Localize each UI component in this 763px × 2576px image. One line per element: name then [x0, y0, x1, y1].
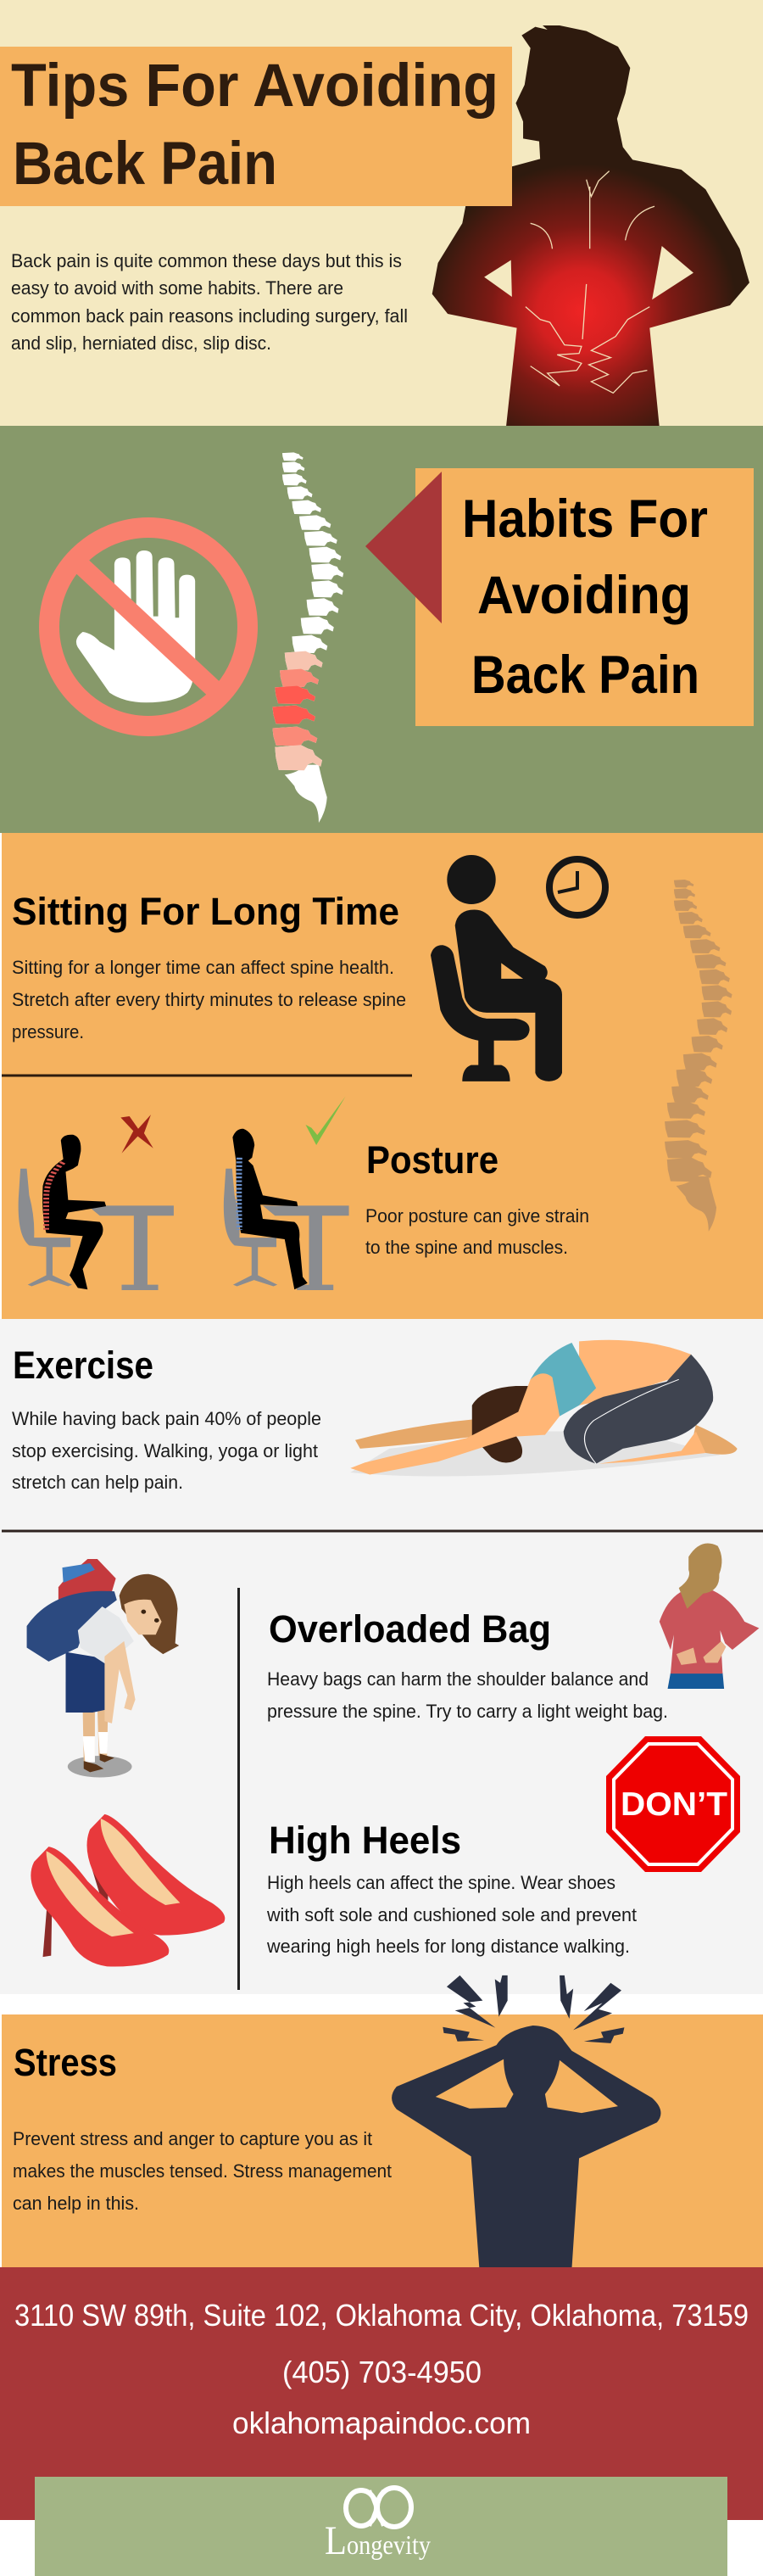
panel: sitting and posture [2, 833, 763, 1319]
icon: don't stop sign [606, 1736, 740, 1872]
heading: posture: Posture [366, 1138, 498, 1182]
title banner: Back Pain [13, 131, 277, 198]
text: sitting [12, 957, 406, 1042]
logo wordmark: Longevity [325, 2518, 431, 2563]
intro text: easy to avoid with some habits. There are [11, 277, 343, 299]
text: sitting: pressure. [12, 1021, 84, 1042]
panel: habits [0, 426, 763, 833]
text: high heels: with soft sole and cushioned sole and prevent [266, 1904, 637, 1925]
text: high heels: wearing high heels for long distance walking. [266, 1936, 630, 1957]
intro text: Back pain is quite common these days but this is [11, 250, 402, 271]
heading: sitting: Sitting For Long Time [12, 890, 399, 933]
intro text: common back pain reasons including surgery, fall [11, 305, 408, 327]
text: sitting: Stretch after every thirty minutes to release spine [12, 989, 406, 1010]
icon: seated person [431, 855, 562, 1081]
icon: clock [549, 859, 605, 915]
text: stress: makes the muscles tensed. Stress management [13, 2160, 392, 2182]
title banner: Tips For Avoiding [11, 53, 498, 120]
text: posture: Poor posture can give strain [365, 1205, 589, 1227]
heading: overloaded bag: Overloaded Bag [269, 1607, 551, 1651]
text: exercise: While having back pain 40% of people [12, 1408, 321, 1429]
text: high heels: High heels can affect the spine. Wear shoes [267, 1872, 615, 1893]
illustration: good posture [224, 1097, 349, 1290]
illustration: stressed man with lightning [392, 1975, 660, 2268]
panel: stress [2, 1975, 763, 2268]
heading: exercise: Exercise [13, 1344, 153, 1387]
heading: stress: Stress [14, 2041, 117, 2084]
text: overloaded bag [267, 1668, 668, 1722]
icon: infinity logo [346, 2488, 411, 2527]
icon: don't stop sign: DON’T [621, 1786, 727, 1823]
text: overloaded bag: pressure the spine. Try to carry a light weight bag. [267, 1701, 668, 1722]
panel: contact footer [0, 2267, 763, 2520]
text: overloaded bag: Heavy bags can harm the shoulder balance and [267, 1668, 649, 1690]
intro text [11, 250, 408, 354]
website: oklahomapaindoc.com [232, 2406, 531, 2440]
heading box with arrow [365, 468, 754, 726]
man silhouette with back pain [432, 25, 749, 427]
text: posture [365, 1205, 589, 1258]
intro text: and slip, herniated disc, slip disc. [11, 332, 271, 354]
text: stress: Prevent stress and anger to capture you as it [13, 2128, 372, 2149]
heading box with arrow: Avoiding [477, 566, 691, 625]
divider: vertical [237, 1588, 240, 1990]
phone: (405) 703-4950 [282, 2355, 482, 2389]
heading: high heels: High Heels [269, 1819, 461, 1862]
icon: white spine [272, 452, 343, 823]
icon: prohibited hand [49, 528, 248, 726]
heading box with arrow: Back Pain [471, 645, 699, 705]
illustration: bad posture [19, 1115, 174, 1290]
panel: exercise, bag, heels [0, 1319, 763, 1994]
text: high heels [266, 1872, 637, 1957]
icon: tan spine [665, 880, 732, 1232]
text: stress [13, 2128, 392, 2214]
text: sitting: Sitting for a longer time can affect spine health. [12, 957, 394, 978]
title banner [0, 47, 512, 206]
illustration: red high heels [31, 1814, 225, 1967]
text: exercise: stretch can help pain. [12, 1472, 183, 1493]
text: exercise: stop exercising. Walking, yoga or light [12, 1440, 318, 1461]
panel: intro [0, 0, 763, 427]
illustration: girl with heavy bag [27, 1559, 179, 1778]
text: exercise [12, 1408, 321, 1493]
panel: logo [35, 2477, 727, 2576]
illustration: woman holding back [660, 1544, 759, 1689]
heading box with arrow: Habits For [462, 489, 708, 549]
text: stress: can help in this. [13, 2193, 139, 2214]
illustration: yoga child pose [350, 1340, 738, 1477]
text: posture: to the spine and muscles. [365, 1237, 568, 1258]
